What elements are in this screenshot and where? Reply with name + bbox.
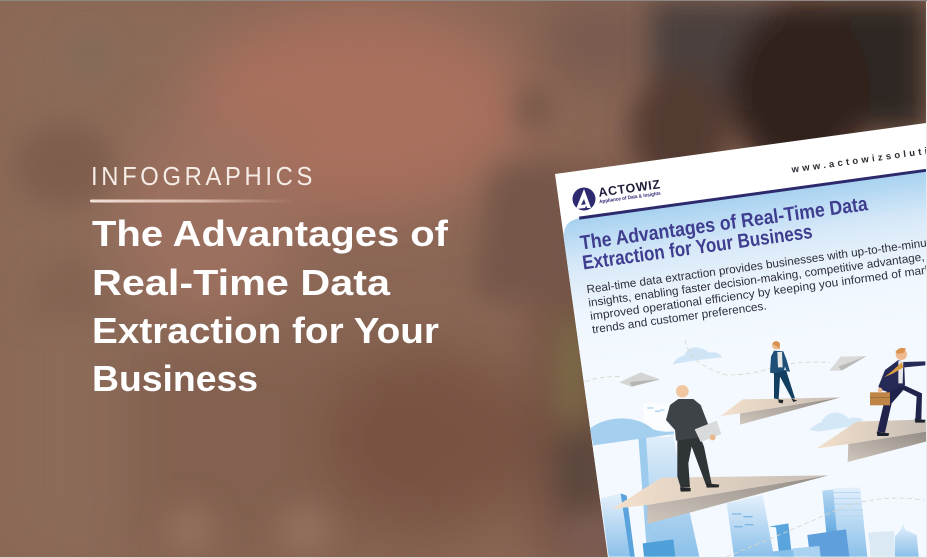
sheet intro text: improved operational efficiency by keeping you informed of market — [590, 263, 927, 323]
main heading: Extraction for Your — [92, 310, 439, 351]
middle paper plane — [721, 397, 841, 425]
sheet title — [578, 193, 873, 274]
sheet title: The Advantages of Real-Time Data — [579, 193, 870, 255]
man with briefcase — [870, 348, 925, 436]
woman in navy suit — [770, 341, 797, 403]
logo wordmark: ACTOWIZ — [598, 177, 661, 200]
large paper plane — [612, 475, 828, 524]
navy header rule — [579, 170, 926, 218]
city skyline — [590, 403, 919, 557]
right paper plane — [817, 419, 926, 462]
dashed flight paths — [585, 340, 924, 557]
logo mark — [572, 188, 596, 210]
rotated sheet text — [572, 132, 927, 336]
blue gradient panel — [564, 170, 926, 557]
main heading — [92, 213, 449, 399]
main heading: The Advantages of — [92, 213, 449, 254]
main heading: Business — [92, 358, 258, 399]
man with laptop — [666, 385, 721, 492]
illustration: business people on paper planes — [585, 340, 926, 557]
small paper planes — [619, 356, 867, 387]
white paper — [555, 123, 926, 557]
sheet intro text — [586, 235, 927, 336]
fading divider under eyebrow — [90, 200, 296, 202]
main heading: Real-Time Data — [92, 262, 391, 303]
clouds — [673, 347, 863, 432]
tilted infographic preview sheet — [555, 123, 927, 557]
sheet intro text: trends and customer preferences. — [591, 300, 767, 336]
logo tagline: Appliance of Data & Insights — [599, 191, 661, 205]
eyebrow: INFOGRAPHICS: INFOGRAPHICS — [91, 161, 316, 191]
sheet title: Extraction for Your Business — [581, 221, 814, 274]
sheet intro text: Real-time data extraction provides businesses with up-to-the-minute — [586, 236, 927, 296]
